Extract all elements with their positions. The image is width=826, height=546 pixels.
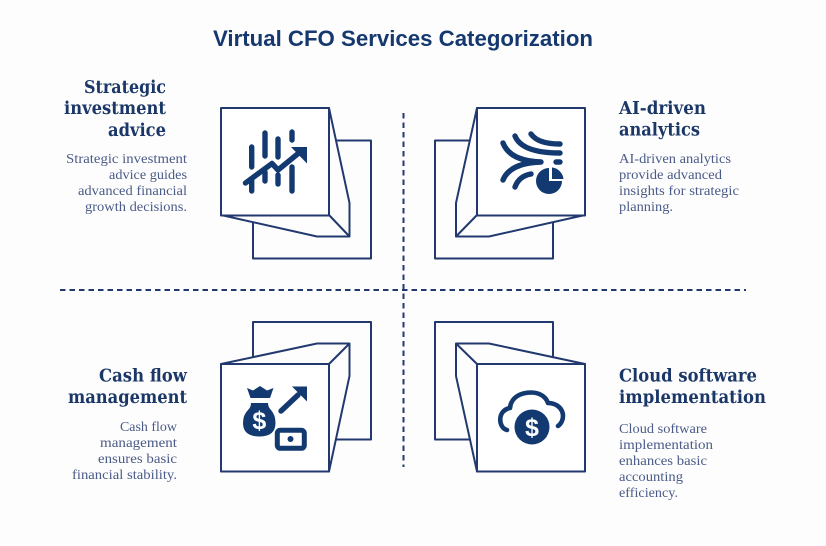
heading: cloud software implementation: implementation — [619, 388, 766, 408]
text: cash flow description — [72, 420, 178, 483]
text: AI-driven analytics description: insights for strategic — [619, 184, 739, 199]
heading: AI-driven analytics: AI-driven — [618, 99, 706, 119]
text: AI-driven analytics description: planning. — [619, 200, 673, 215]
heading: cash flow management: management — [68, 388, 187, 408]
icon: cloud with dollar coin: $ — [525, 414, 539, 442]
text: cloud software description — [619, 422, 713, 501]
icon: money bag, arrow and banknote: $ — [252, 407, 266, 435]
text: cloud software description: Cloud software — [619, 422, 707, 437]
heading: strategic investment advice — [64, 78, 166, 141]
box: strategic 3D frame — [221, 108, 371, 258]
vertical dashed divider — [402, 113, 404, 467]
heading: strategic investment advice: advice — [108, 121, 166, 141]
text: strategic investment description: advice guides — [109, 168, 187, 183]
title: Virtual CFO Services Categorization — [213, 26, 593, 51]
text: cash flow description: financial stability. — [72, 468, 177, 483]
text: AI-driven analytics description: AI-driven analytics — [619, 152, 731, 167]
icon: money bag, arrow and banknote — [243, 386, 307, 448]
text: cash flow description: Cash flow — [120, 420, 178, 435]
panel: cash flow management — [68, 322, 371, 483]
heading: AI-driven analytics: analytics — [619, 120, 700, 140]
panel: cloud software implementation — [435, 322, 766, 501]
icon: bars with rising arrow — [246, 132, 307, 191]
box: cash flow 3D frame — [221, 322, 371, 472]
icon: cloud with dollar coin — [500, 392, 563, 444]
text: cash flow description: ensures basic — [98, 452, 177, 467]
text: cloud software description: efficiency. — [619, 486, 678, 501]
heading: AI-driven analytics — [618, 99, 706, 140]
text: AI-driven analytics description: provide advanced — [619, 168, 722, 183]
icon: data streams and pie chart — [503, 134, 564, 194]
box: analytics 3D frame — [435, 108, 585, 258]
heading: strategic investment advice: investment — [64, 99, 166, 119]
text: cloud software description: implementation — [619, 438, 713, 453]
heading: strategic investment advice: Strategic — [84, 78, 166, 98]
horizontal dashed divider — [60, 289, 746, 291]
panel: AI-driven analytics — [435, 99, 739, 258]
box: cloud 3D frame — [435, 322, 585, 472]
text: strategic investment description: Strategic investment — [66, 152, 187, 167]
text: strategic investment description: growth decisions. — [85, 200, 187, 215]
text: strategic investment description — [66, 152, 187, 215]
heading: cloud software implementation: Cloud software — [619, 366, 757, 386]
text: strategic investment description: advanced financial — [78, 184, 187, 199]
text: AI-driven analytics description — [619, 152, 739, 215]
text: cloud software description: enhances basic — [619, 454, 707, 469]
panel: strategic investment advice — [64, 78, 371, 258]
text: cloud software description: accounting — [619, 470, 683, 485]
heading: cash flow management: Cash flow — [99, 366, 188, 386]
heading: cloud software implementation — [619, 366, 766, 408]
text: cash flow description: management — [100, 436, 177, 451]
heading: cash flow management — [68, 366, 188, 408]
